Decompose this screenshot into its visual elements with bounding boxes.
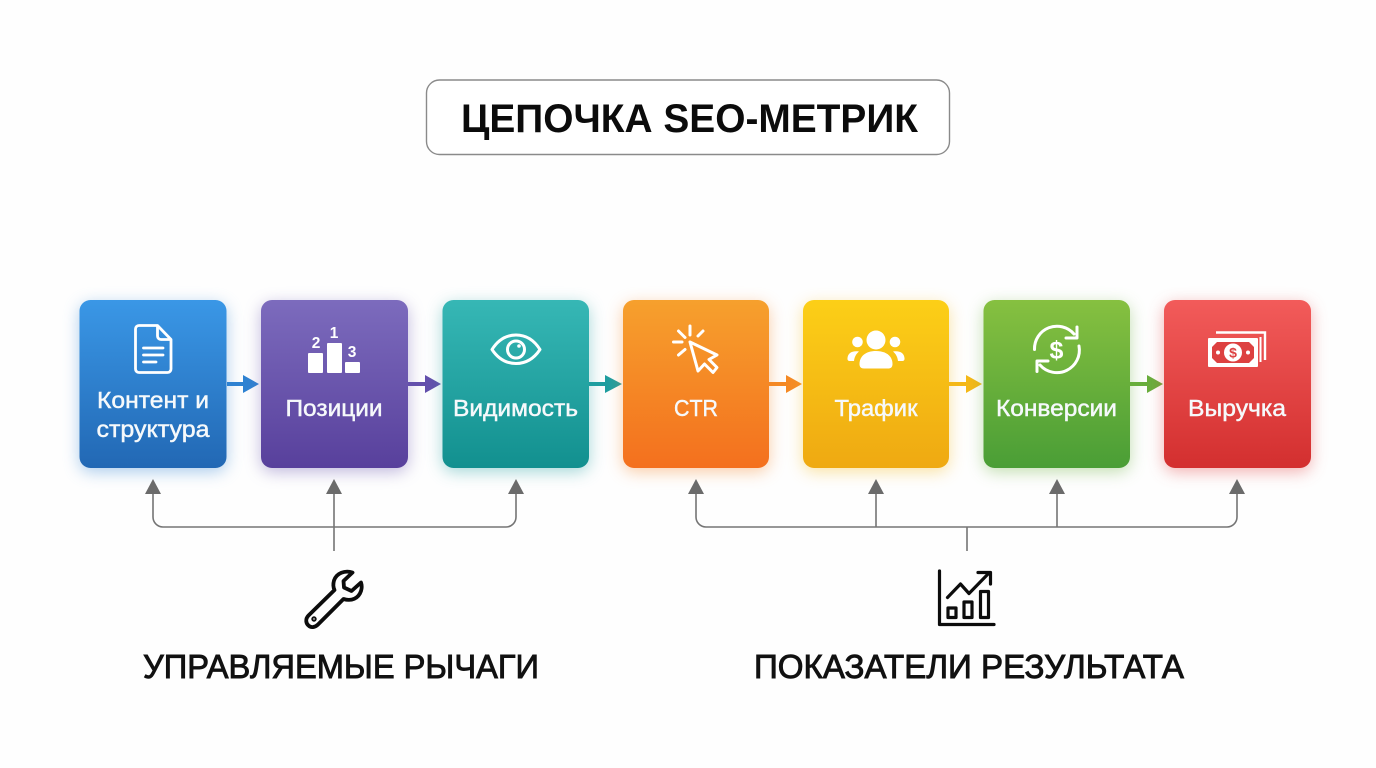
icon: podium xyxy=(308,325,360,373)
label: visibility: Видимость xyxy=(453,395,578,421)
panel: positions xyxy=(261,300,408,468)
icon: wrench xyxy=(306,572,362,627)
label: traffic: Трафик xyxy=(834,395,918,421)
icon: eye xyxy=(492,335,540,364)
panel: traffic xyxy=(803,300,949,468)
label: CTR: CTR xyxy=(674,395,718,421)
connector: result metrics bracket xyxy=(688,479,1245,551)
panel: conversions xyxy=(984,300,1130,468)
icon: podium: 1 xyxy=(330,325,339,342)
title xyxy=(426,80,950,154)
arrow: positions to visibility xyxy=(408,375,441,393)
arrow: conversions to revenue xyxy=(1130,375,1163,393)
icon: money cycle: $ xyxy=(1050,336,1064,364)
panel: visibility xyxy=(442,300,589,468)
panel: content and structure xyxy=(80,300,226,468)
icon: banknotes xyxy=(1208,332,1265,367)
arrow: traffic to conversions xyxy=(949,375,982,393)
label: conversions: Конверсии xyxy=(996,395,1117,421)
panel: revenue xyxy=(1164,300,1311,468)
icon: growth chart xyxy=(940,571,994,624)
label: content and structure: Контент и xyxy=(97,387,209,413)
label: content and structure xyxy=(96,387,210,442)
arrow: visibility to CTR xyxy=(589,375,622,393)
title: ЦЕПОЧКА SEO-МЕТРИК xyxy=(461,97,919,141)
arrow: content to positions xyxy=(227,375,259,393)
icon: banknotes: $ xyxy=(1229,344,1237,360)
icon: people xyxy=(847,330,905,368)
label: positions: Позиции xyxy=(286,395,382,421)
heading: result metrics: ПОКАЗАТЕЛИ РЕЗУЛЬТАТА xyxy=(754,648,1184,685)
icon: money cycle xyxy=(1034,326,1079,373)
panel: CTR xyxy=(623,300,769,468)
icon: cursor click xyxy=(674,326,717,372)
connector: managed levers bracket xyxy=(145,479,524,551)
heading: managed levers: УПРАВЛЯЕМЫЕ РЫЧАГИ xyxy=(143,648,539,685)
icon: podium: 3 xyxy=(348,344,357,361)
icon: podium: 2 xyxy=(312,335,320,352)
icon: document xyxy=(136,326,171,372)
label: content and structure: структура xyxy=(96,416,210,442)
arrow: CTR to traffic xyxy=(769,375,802,393)
label: revenue: Выручка xyxy=(1188,395,1286,421)
